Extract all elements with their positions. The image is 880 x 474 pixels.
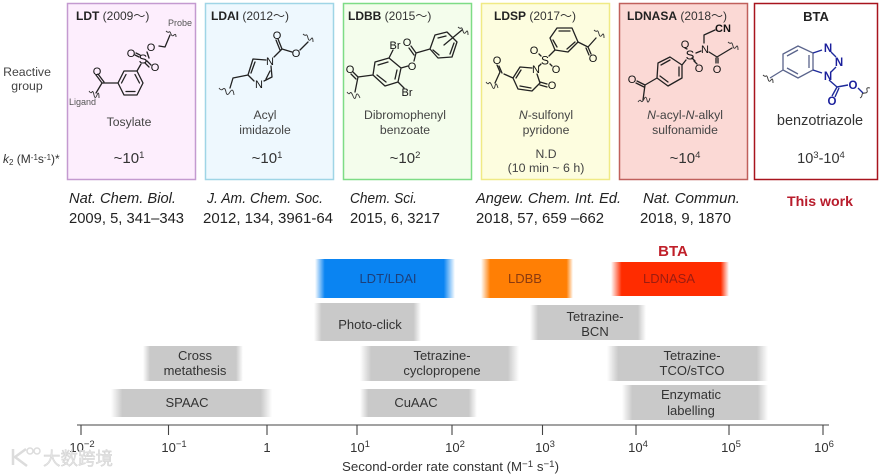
bar: Enzymatic labelling: labelling (667, 403, 715, 418)
panel: BTA: 4 (840, 150, 845, 161)
bar: Tetrazine-BCN (530, 305, 646, 340)
panel: LDAI: imidazole (239, 123, 291, 137)
panel: LDNASA: O (713, 64, 722, 76)
panel: LDNASA (620, 4, 748, 180)
panel: LDNASA: O (681, 39, 690, 51)
panel: LDSP: LDSP (2017〜) (494, 9, 576, 23)
row labels: group (11, 79, 43, 93)
row labels: -1 (31, 153, 38, 162)
row labels: -1 (44, 153, 52, 162)
panel: LDT: O (93, 66, 102, 78)
panel: LDAI: 1 (277, 150, 282, 161)
panel: LDNASA: 4 (695, 150, 700, 161)
x axis: −1 (176, 439, 187, 450)
axis title: s (533, 459, 544, 474)
panel: BTA: O (849, 80, 858, 92)
panel: LDNASA: S (686, 48, 695, 62)
panel: LDT: O (147, 42, 156, 54)
axis title: ) (555, 459, 559, 474)
panel: BTA: BTA (803, 9, 829, 24)
panel: LDSP: O (493, 55, 502, 67)
citation: LDBB: Chem. Sci. (350, 191, 417, 207)
panel: LDAI: Acyl (253, 108, 277, 122)
bar: Cross metathesis: metathesis (164, 363, 227, 378)
bar: Tetrazine-TCO/sTCO: TCO/sTCO (660, 363, 724, 378)
x axis: 2 (460, 439, 465, 450)
panel: LDT: 1 (139, 150, 144, 161)
citation: LDT: Nat. Chem. Biol. (69, 191, 176, 207)
panel: LDT: S (139, 52, 148, 66)
panel: LDSP: O (552, 64, 561, 76)
panel: LDBB: O (408, 61, 417, 73)
axis title: −1 (543, 459, 555, 470)
citation: LDSP: Angew. Chem. Int. Ed. (475, 191, 621, 207)
panel: BTA: 10 (797, 151, 813, 167)
panel: LDNASA: O (695, 63, 704, 75)
panel: LDNASA: N (701, 44, 709, 56)
x axis: 10 (161, 440, 176, 455)
citation: LDNASA: 2018, 9, 1870 (640, 211, 731, 227)
bar: LDT/LDAI: LDT/LDAI (359, 271, 417, 286)
panel: BTA: N (835, 57, 843, 69)
bar: Photo-click: Photo-click (338, 317, 402, 332)
panel: BTA: O (828, 96, 837, 108)
bar: Cross metathesis: Cross (178, 348, 212, 363)
row labels: )* (51, 152, 60, 166)
panel: BTA: N (824, 71, 832, 83)
panel: LDT: LDT (2009〜) (76, 9, 149, 23)
range chart (111, 243, 768, 420)
citation: LDNASA: Nat. Commun. (643, 191, 740, 207)
panel: BTA: benzotriazole (777, 113, 863, 129)
bar: LDNASA: LDNASA (643, 271, 695, 286)
panel: LDSP: O (589, 53, 598, 65)
row labels: Reactive (3, 65, 51, 79)
panel: LDAI: N (255, 79, 263, 91)
bar: Tetrazine-TCO/sTCO (607, 346, 768, 381)
citation: LDBB: 2015, 6, 3217 (350, 211, 440, 227)
bar: LDBB (481, 259, 573, 298)
panel: LDBB: 2 (415, 150, 420, 161)
panel: LDBB: LDBB (2015〜) (348, 9, 431, 23)
bar: CuAAC: CuAAC (394, 395, 438, 410)
panel: LDBB: ~10 (390, 150, 415, 167)
citation: LDNASA (640, 191, 740, 227)
panel: LDAI: LDAI (2012〜) (211, 9, 289, 23)
x axis: 10 (628, 440, 643, 455)
bar: LDT/LDAI (315, 259, 455, 298)
panel: LDT (68, 4, 196, 180)
label: BTA: BTA (658, 243, 688, 260)
panel: BTA: 3 (813, 150, 819, 161)
x axis: 6 (829, 439, 834, 450)
panel: LDSP (482, 4, 610, 180)
row labels (3, 65, 60, 167)
watermark (13, 448, 113, 469)
panel: LDT: O (151, 62, 160, 74)
axis title: −1 (522, 459, 533, 470)
axis title: Second-order rate constant (M (342, 459, 518, 474)
panel: LDBB: Br (390, 40, 401, 52)
panel: LDNASA: LDNASA (2018〜) (627, 9, 727, 23)
x axis: 10 (69, 440, 84, 455)
panel: LDSP: N.D (536, 147, 557, 161)
bar: CuAAC (360, 389, 477, 417)
watermark: 大数跨境 (43, 449, 113, 469)
panel: LDT: Tosylate (107, 115, 152, 129)
bar: Tetrazine-cyclopropene: Tetrazine- (413, 348, 471, 363)
x axis: 10 (445, 440, 460, 455)
citation: LDAI: J. Am. Chem. Soc. (206, 191, 323, 207)
panel: LDBB: benzoate (380, 123, 430, 137)
bar: Cross metathesis (143, 346, 243, 381)
bar: Tetrazine-BCN: BCN (581, 324, 609, 339)
panel: LDSP: S (541, 54, 549, 68)
panel: LDSP: pyridone (523, 123, 570, 137)
x axis: 1 (263, 440, 271, 455)
panel: LDT: ~10 (114, 150, 139, 167)
citation: LDSP (475, 191, 621, 227)
row labels: k (3, 152, 10, 166)
bar: SPAAC: SPAAC (165, 395, 209, 410)
citation: LDT (69, 191, 184, 227)
panel: LDSP: O (548, 80, 557, 92)
citation: this work: This work (787, 193, 853, 209)
x axis: 10 (721, 440, 736, 455)
bar: Tetrazine-cyclopropene (360, 346, 519, 381)
panel: BTA: N (824, 43, 832, 55)
x axis: 10 (350, 440, 365, 455)
x axis: 10 (535, 440, 550, 455)
panel: LDSP: N (532, 64, 540, 76)
panel: LDT: Ligand (69, 97, 96, 107)
panel: LDBB: O (346, 64, 355, 76)
x axis (69, 425, 834, 474)
panel: LDBB (344, 4, 472, 180)
panel: LDNASA: O (628, 74, 637, 86)
citation: LDT: 2009, 5, 341–343 (69, 211, 184, 227)
panel: LDBB: Dibromophenyl (364, 108, 446, 122)
row labels: (M (13, 152, 31, 166)
panel: BTA: -10 (819, 151, 840, 167)
panel: LDNASA: sulfonamide (652, 123, 718, 137)
citation: LDAI: 2012, 134, 3961-64 (203, 211, 333, 227)
panel: LDBB: O (403, 37, 412, 49)
citation: LDBB (350, 191, 440, 227)
x axis: 5 (736, 439, 741, 450)
x axis: −2 (84, 439, 95, 450)
bar: LDBB: LDBB (508, 271, 542, 286)
panel: BTA (754, 4, 878, 180)
panel: LDAI (206, 4, 334, 180)
panel: LDNASA: CN (715, 23, 731, 35)
x axis: 4 (643, 439, 648, 450)
bar: LDNASA (611, 262, 729, 296)
panel: LDAI: ~10 (252, 150, 277, 167)
bar: Photo-click (314, 303, 421, 341)
bar: Tetrazine-BCN: Tetrazine- (566, 309, 624, 324)
x axis: 1 (365, 439, 370, 450)
panel: LDAI: O (273, 30, 282, 42)
panel: LDNASA: ~10 (670, 150, 695, 167)
bar: Tetrazine-cyclopropene: cyclopropene (403, 363, 481, 378)
panel: LDT: Probe (168, 18, 192, 28)
citation: LDAI (203, 191, 333, 227)
panel: LDSP: (10 min ~ 6 h) (508, 161, 584, 175)
row labels: s (38, 152, 44, 166)
x axis: 10 (814, 440, 829, 455)
panel: LDT: O (127, 48, 136, 60)
bar: Tetrazine-TCO/sTCO: Tetrazine- (663, 348, 721, 363)
bar: Enzymatic labelling (622, 385, 768, 420)
row labels: 2 (9, 158, 14, 167)
bar: SPAAC (111, 389, 272, 417)
bar: Enzymatic labelling: Enzymatic (661, 387, 721, 402)
panel: LDSP: N-sulfonyl (519, 108, 573, 122)
panel: LDAI: N (266, 56, 274, 68)
panel: LDBB: Br (402, 87, 413, 99)
citation: LDSP: 2018, 57, 659 –662 (476, 211, 604, 227)
panel: LDNASA: N-acyl-N-alkyl (647, 108, 723, 122)
panel: LDAI: O (292, 48, 301, 60)
x axis: 3 (550, 439, 555, 450)
panel: LDSP: O (530, 45, 539, 57)
